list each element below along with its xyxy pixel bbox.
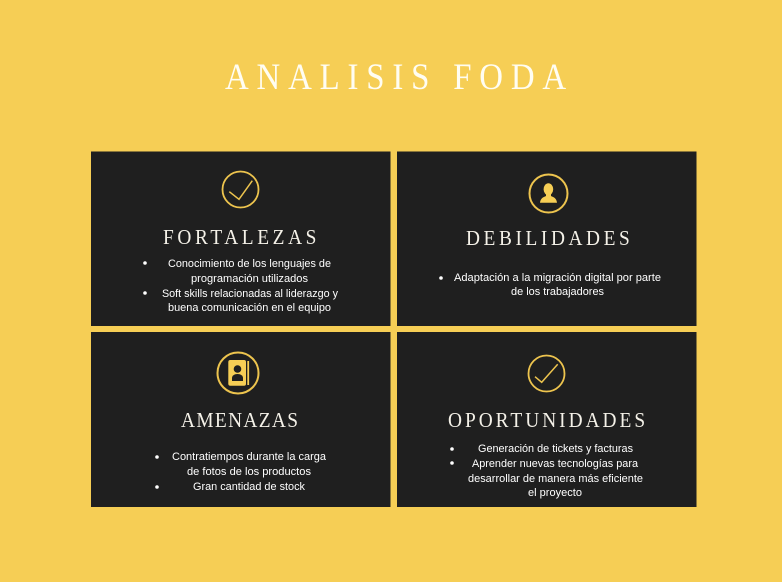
list: amenazas: Gran cantidad de stock bbox=[193, 481, 306, 493]
title: ANALISIS FODA bbox=[225, 56, 566, 97]
list: debilidades: de los trabajadores bbox=[511, 286, 605, 298]
list: oportunidades bbox=[450, 443, 643, 499]
panel: oportunidades bbox=[397, 332, 696, 507]
heading: amenazas: AMENAZAS bbox=[181, 409, 298, 432]
heading: oportunidades: OPORTUNIDADES bbox=[448, 409, 645, 432]
list: debilidades: Adaptación a la migración digital por parte bbox=[454, 272, 661, 284]
list: amenazas bbox=[155, 451, 326, 493]
panel: debilidades bbox=[397, 152, 696, 326]
list: fortalezas: buena comunicación en el equipo bbox=[168, 302, 331, 314]
list: oportunidades: Generación de tickets y facturas bbox=[478, 443, 634, 455]
list: amenazas: Contratiempos durante la carga bbox=[172, 451, 326, 463]
icon: person circle bbox=[530, 174, 568, 212]
icon: contact book bbox=[218, 352, 258, 394]
panel: fortalezas bbox=[91, 152, 390, 326]
list: oportunidades: Aprender nuevas tecnologías para bbox=[472, 458, 638, 470]
heading: debilidades: DEBILIDADES bbox=[466, 227, 630, 250]
icon: check circle fortalezas bbox=[222, 172, 258, 208]
list: fortalezas: Conocimiento de los lenguajes de bbox=[168, 258, 331, 270]
list: debilidades bbox=[439, 272, 661, 298]
panel: amenazas bbox=[91, 332, 390, 507]
list: oportunidades: desarrollar de manera más eficiente bbox=[468, 473, 643, 485]
heading: fortalezas: FORTALEZAS bbox=[163, 226, 316, 249]
list: fortalezas bbox=[143, 258, 339, 314]
list: oportunidades: el proyecto bbox=[528, 487, 582, 499]
icon: check circle oportunidades bbox=[528, 356, 564, 392]
list: amenazas: de fotos de los productos bbox=[187, 466, 312, 478]
list: fortalezas: Soft skills relacionadas al liderazgo y bbox=[162, 288, 339, 300]
list: fortalezas: programación utilizados bbox=[191, 273, 309, 285]
